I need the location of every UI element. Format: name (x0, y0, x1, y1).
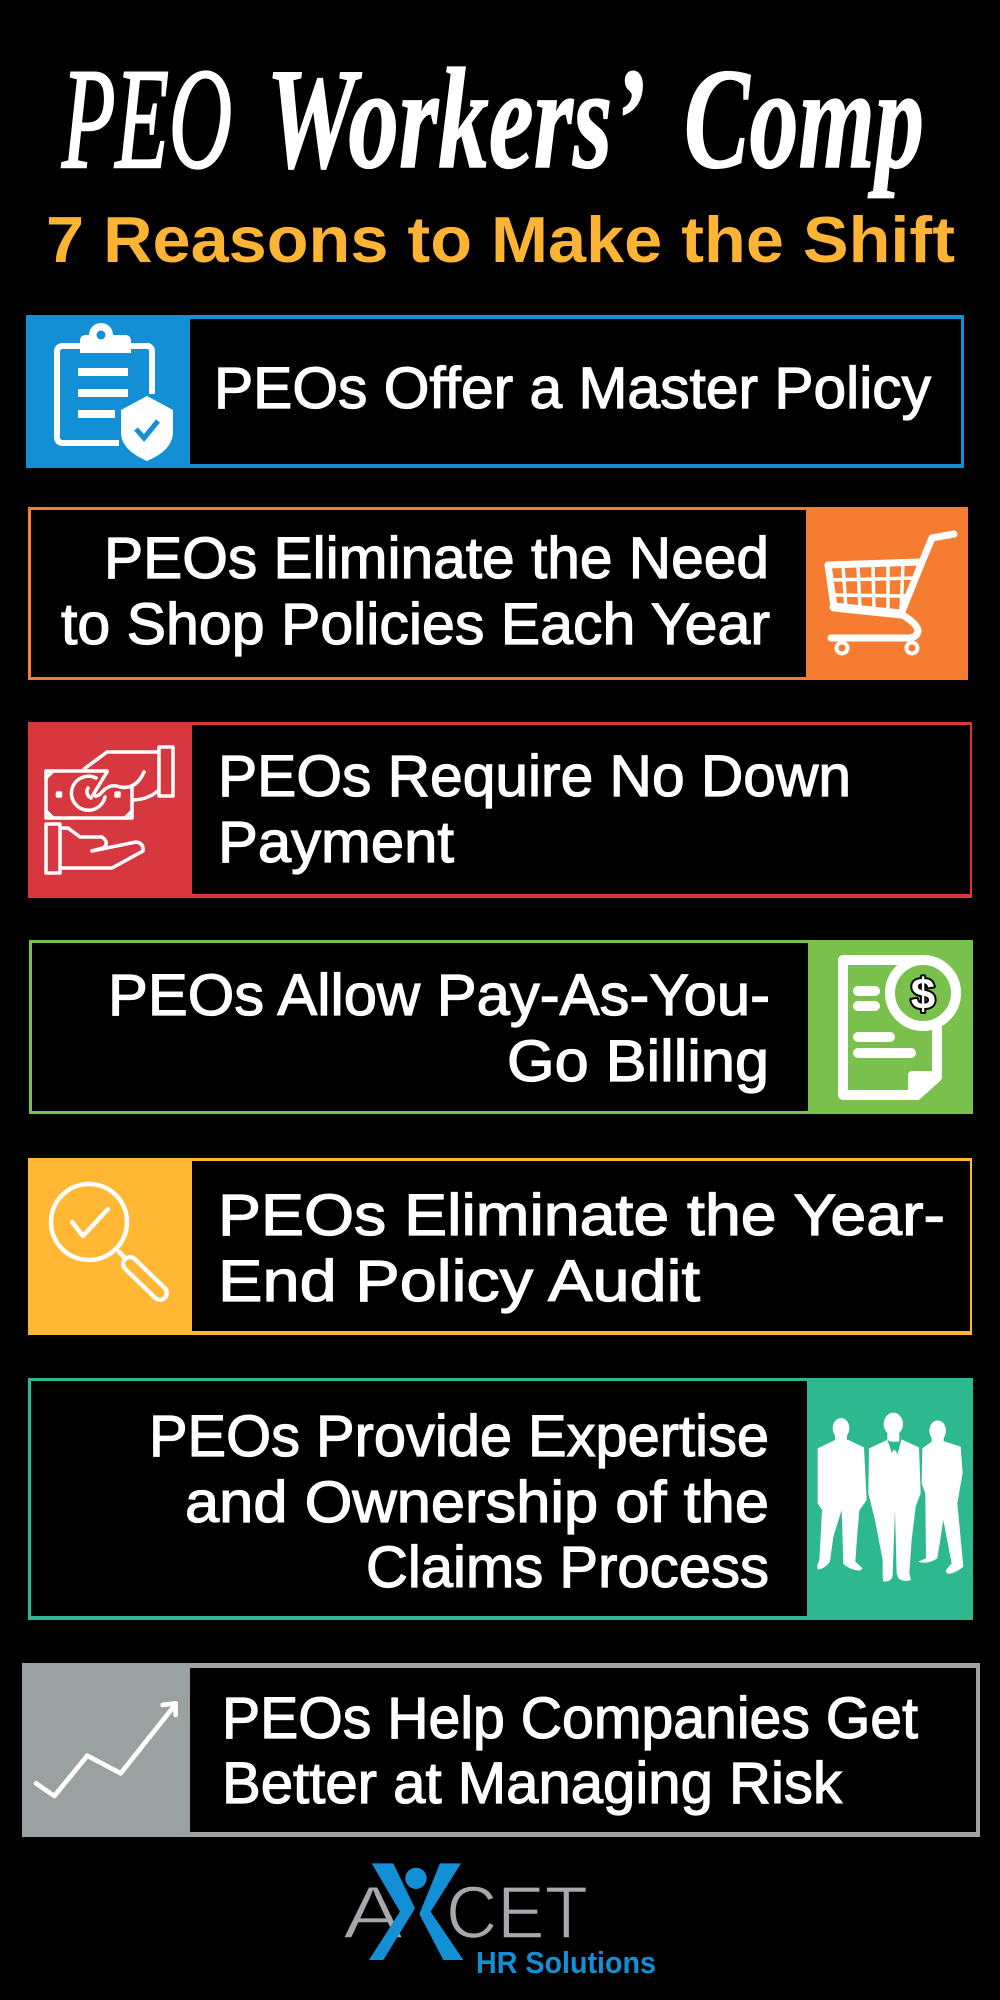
title (61, 40, 924, 199)
text: reason 4: PEOs Allow Pay-As-You- (108, 963, 770, 1028)
panel: no down payment (28, 722, 972, 898)
title: PEO (61, 40, 232, 199)
text: reason 7 (222, 1686, 918, 1816)
logo mark: blue X (369, 1863, 463, 1960)
panel: master policy (26, 315, 964, 468)
title: Workers’ (266, 40, 646, 199)
text: reason 1: PEOs Offer a Master Policy (214, 356, 931, 421)
text: reason 6: Claims Process (366, 1535, 769, 1600)
dollar sign: $ (911, 970, 935, 1019)
text: reason 5: PEOs Eliminate the Year- (218, 1183, 945, 1248)
text: reason 5 (218, 1183, 945, 1314)
text: reason 7: Better at Managing Risk (222, 1751, 843, 1816)
subtitle: 7 Reasons to Make the Shift (46, 203, 955, 276)
panel: managing risk (22, 1663, 980, 1837)
text: reason 6: and Ownership of the (185, 1470, 769, 1535)
text: reason 2: PEOs Eliminate the Need (104, 526, 769, 591)
text: reason 4 (108, 963, 770, 1094)
icon: rising trend arrow (36, 1703, 176, 1796)
icon: three business people (817, 1413, 963, 1582)
text: reason 4: Go Billing (507, 1029, 769, 1094)
text: reason 5: End Policy Audit (218, 1249, 700, 1314)
text: reason 6 (149, 1404, 769, 1600)
text: reason 3: PEOs Require No Down (218, 744, 851, 809)
panel: shop policies (28, 507, 968, 680)
text: reason 2 (61, 526, 770, 657)
text: reason 3 (218, 744, 851, 875)
panel: claims expertise (28, 1378, 973, 1620)
text: reason 2: to Shop Policies Each Year (61, 592, 770, 657)
icon: clipboard with shield (57, 323, 173, 461)
icon: hand giving money (46, 747, 173, 873)
logo: Axcet HR Solutions (343, 1863, 656, 1980)
text: reason 7: PEOs Help Companies Get (222, 1686, 918, 1751)
icon: invoice with dollar (843, 960, 956, 1095)
logo: Axcet HR Solutions: A (343, 1871, 404, 1954)
icon: magnifier with check (51, 1184, 160, 1293)
panel: pay-as-you-go (29, 940, 973, 1114)
text: reason 6: PEOs Provide Expertise (149, 1404, 769, 1469)
panel: year-end audit (28, 1158, 972, 1335)
logo: Axcet HR Solutions: CET (446, 1871, 588, 1954)
logo: Axcet HR Solutions: HR Solutions (476, 1945, 656, 1980)
text: reason 3: Payment (218, 810, 454, 875)
icon: shopping cart (828, 534, 954, 654)
